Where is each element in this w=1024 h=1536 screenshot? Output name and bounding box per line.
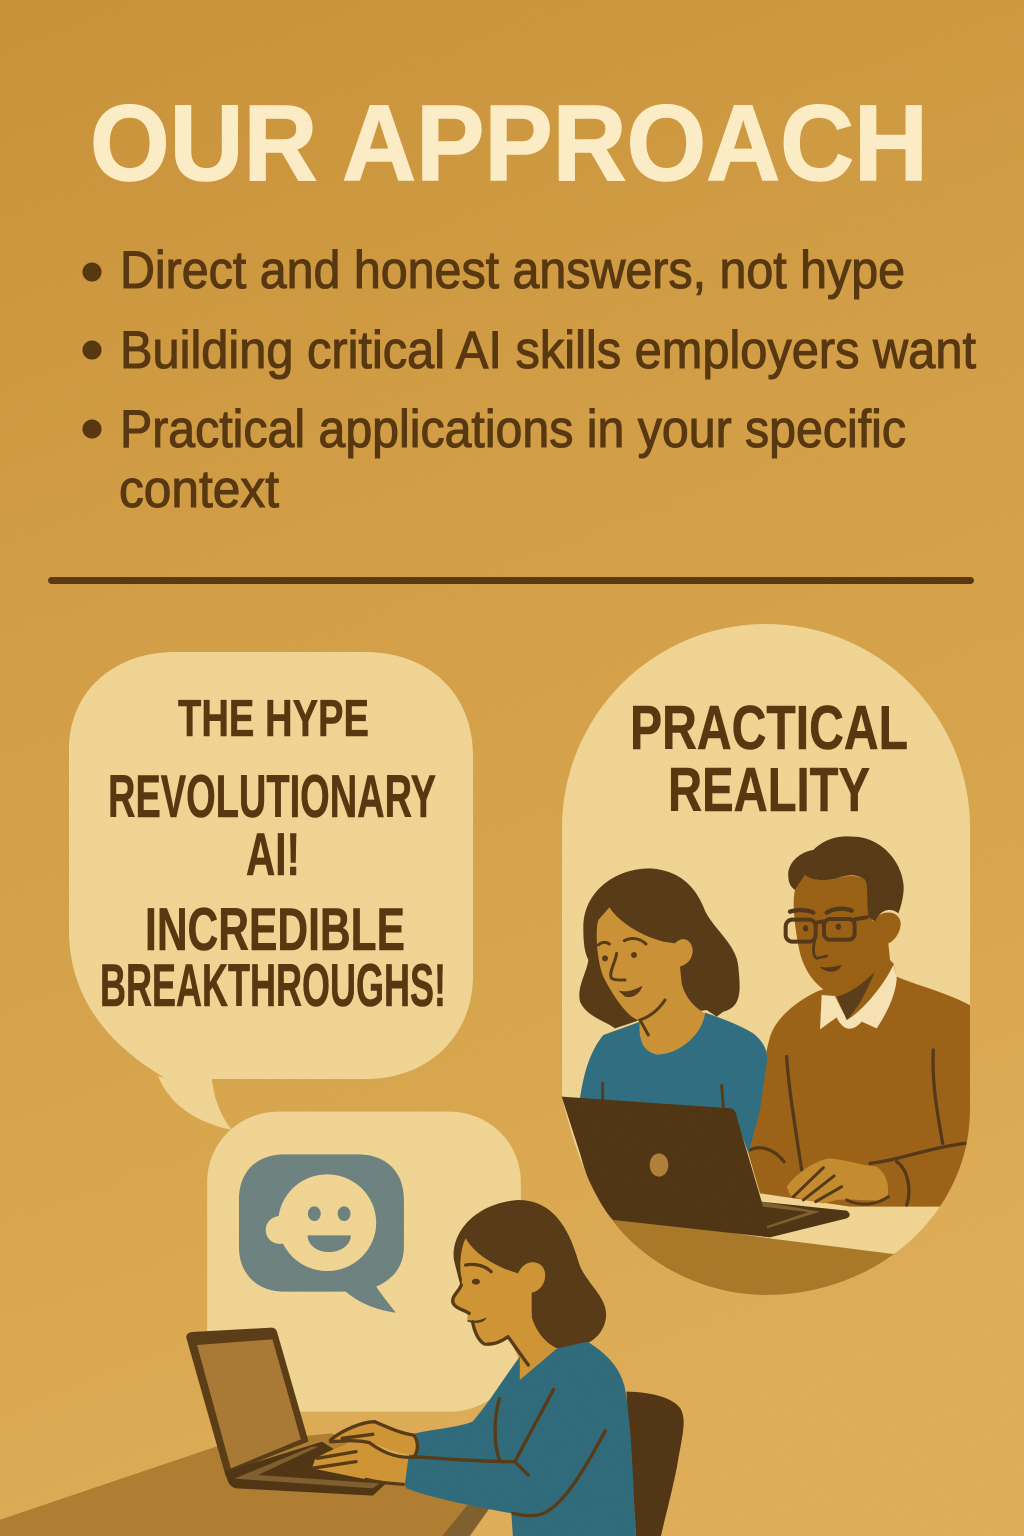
hype text: AI! bbox=[246, 821, 300, 888]
laptop bbox=[186, 1328, 386, 1496]
bullet: AI skills: Building critical AI skills employers want bbox=[120, 321, 976, 380]
hype text: REVOLUTIONARY bbox=[108, 763, 436, 830]
woman bbox=[579, 868, 767, 1153]
scene: woman at laptop with chatbot bbox=[0, 1112, 684, 1536]
bullet: practical applications bbox=[83, 400, 906, 519]
table bbox=[0, 1433, 489, 1536]
practical reality heading bbox=[630, 694, 908, 825]
man bbox=[748, 836, 973, 1207]
laptop bbox=[562, 1097, 850, 1237]
title: OUR APPROACH bbox=[90, 82, 928, 203]
table leg bbox=[440, 1505, 489, 1536]
table bbox=[609, 1216, 895, 1295]
bullet: practical applications: context bbox=[119, 460, 279, 519]
chat thought bubble bbox=[207, 1112, 521, 1412]
hype text: BREAKTHROUGHS! bbox=[100, 952, 446, 1019]
woman typing bbox=[312, 1200, 636, 1536]
practical reality heading: REALITY bbox=[668, 756, 870, 825]
speech bubble: the hype bbox=[69, 652, 473, 1130]
divider bbox=[48, 577, 974, 584]
hype text bbox=[100, 763, 446, 1019]
bullet: practical applications: Practical applications in your specific bbox=[120, 400, 906, 459]
icon: chatbot speech bubble bbox=[239, 1154, 404, 1313]
thought panel: practical reality bbox=[562, 624, 993, 1320]
bullet list bbox=[83, 241, 976, 519]
colleagues illustration bbox=[562, 836, 970, 1295]
chair bbox=[626, 1392, 684, 1536]
hype text: INCREDIBLE bbox=[145, 896, 405, 963]
paper bbox=[772, 1238, 894, 1254]
hype heading: THE HYPE bbox=[178, 690, 369, 748]
practical reality heading: PRACTICAL bbox=[630, 694, 908, 763]
bullet: direct answers: Direct and honest answers, not hype bbox=[120, 241, 905, 300]
